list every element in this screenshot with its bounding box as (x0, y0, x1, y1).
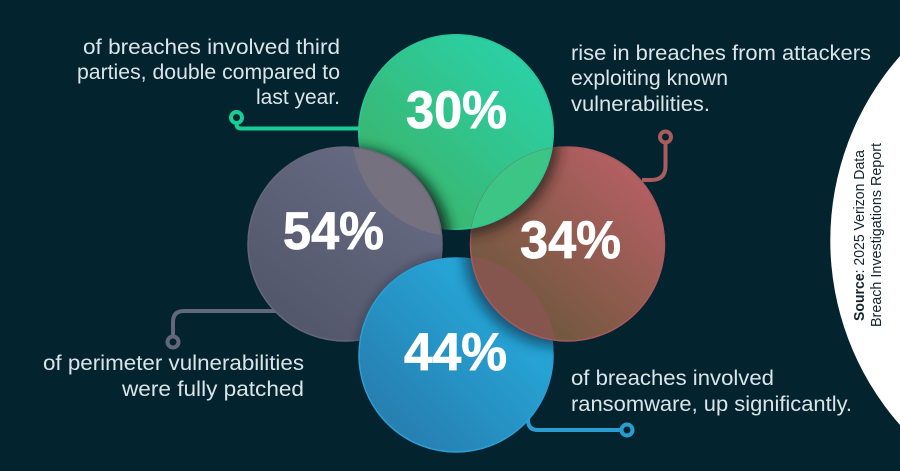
circle: 44% blue (358, 257, 554, 453)
text: ransomware: of breaches involved (571, 367, 774, 390)
stat: 44%: 44% (404, 323, 507, 382)
overlap with blue (472, 256, 555, 341)
text: known vulnerabilities (571, 42, 871, 116)
connector: red (642, 132, 671, 180)
text: ransomware (571, 367, 852, 416)
text: known vulnerabilities: rise in breaches from attackers (571, 42, 871, 65)
text: perimeter vulnerabilities (43, 352, 304, 401)
circle: 54% gray (247, 146, 443, 342)
shadow cast on gray circle (354, 252, 442, 341)
white source arc (830, 56, 900, 425)
shadow cast on red circle (470, 146, 568, 244)
text: third parties (77, 36, 340, 109)
text: third parties: parties, double compared to (77, 61, 340, 84)
text: known vulnerabilities: exploiting known (571, 67, 728, 90)
shadow cast on blue circle (456, 258, 554, 355)
circle: 30% green (358, 34, 554, 230)
connector: gray (168, 311, 282, 348)
overlap with green (354, 147, 440, 235)
circle: 34% red (470, 146, 666, 342)
connector: green (231, 112, 362, 128)
text: ransomware: ransomware, up significantly. (571, 393, 852, 416)
source note: Source: 2025 Verizon Data (851, 149, 868, 321)
text: known vulnerabilities: vulnerabilities. (571, 93, 710, 116)
source note (851, 142, 885, 327)
text: perimeter vulnerabilities: of perimeter vulnerabilities (43, 352, 304, 375)
text: perimeter vulnerabilities: were fully patched (121, 378, 304, 401)
shadow cast on green circle (358, 139, 458, 230)
green overlap on top of red (471, 148, 553, 229)
source note: Breach Investigations Report (868, 142, 885, 327)
stat: 30%: 30% (406, 81, 507, 140)
connector: blue (528, 416, 632, 436)
stat: 34%: 34% (520, 211, 621, 270)
text: third parties: of breaches involved third (83, 36, 340, 59)
text: third parties: last year. (256, 86, 340, 109)
stat: 54%: 54% (283, 202, 384, 261)
